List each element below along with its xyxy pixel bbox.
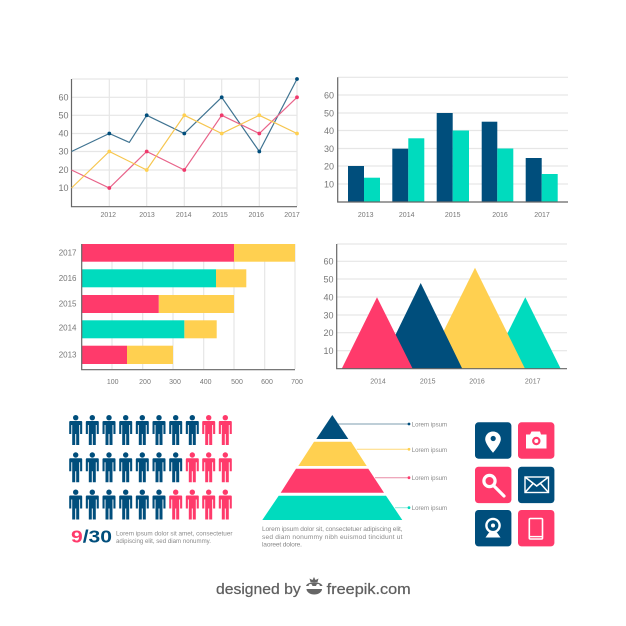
triangle chart: [323, 244, 567, 386]
column chart: 30: [324, 144, 334, 154]
triangle chart: 2015: [420, 378, 436, 386]
line chart: 10: [58, 183, 68, 193]
pyramid caption: [262, 526, 403, 548]
people caption: [116, 530, 233, 545]
footer credit: designed by: [216, 581, 301, 598]
triangle chart: 40: [323, 292, 334, 302]
pyramid connector lines: [338, 424, 409, 508]
line chart: 2017: [284, 212, 300, 219]
horizontal stacked bar chart: 300: [169, 379, 181, 386]
triangle chart: 2017: [525, 378, 541, 386]
triangle chart: 30: [323, 310, 334, 320]
column chart: 2016: [492, 212, 508, 219]
horizontal stacked bar chart: 600: [261, 379, 273, 386]
triangle 2017: [490, 297, 561, 369]
horizontal stacked bar chart: 500: [231, 379, 243, 386]
horizontal stacked bar chart: 100: [107, 379, 119, 386]
triangle chart: 50: [323, 274, 334, 284]
statistic 9/30: 9/30: [71, 526, 112, 546]
column chart: 2014: [399, 212, 415, 219]
column chart: [324, 77, 568, 219]
column chart: 2013: [358, 212, 374, 219]
pyramid chart: Lorem ipsum: [412, 421, 448, 428]
pyramid caption: laoreet dolore.: [262, 542, 302, 548]
pyramid caption: Lorem ipsum dolor sit, consectetuer adipiscing elit,: [262, 526, 403, 533]
people caption: Lorem ipsum dolor sit amet, consectetuer: [116, 530, 233, 537]
icon: envelope: [518, 467, 554, 503]
horizontal stacked bar chart: [59, 244, 303, 386]
horizontal stacked bar chart: 2016: [59, 274, 77, 283]
line chart: 2014: [176, 212, 192, 219]
line chart: 20: [58, 165, 68, 175]
triangle 2016: [425, 268, 525, 369]
pyramid chart: [262, 415, 448, 520]
column chart: 10: [324, 180, 334, 190]
people pictogram: [69, 415, 232, 520]
horizontal stacked bar chart: 700: [291, 379, 303, 386]
pink series: [72, 95, 299, 190]
navy series: [72, 77, 299, 153]
horizontal stacked bar chart: 2015: [59, 300, 77, 308]
line chart: 60: [58, 92, 68, 102]
people caption: adipiscing elit, sed diam nonummy.: [116, 538, 211, 545]
column chart: 2017: [534, 212, 550, 219]
footer credit: [216, 577, 411, 598]
triangle chart: 20: [323, 328, 334, 338]
triangle chart: 2016: [469, 378, 485, 386]
column chart: 20: [324, 162, 334, 172]
line chart: 2015: [212, 212, 228, 219]
yellow series: [72, 113, 299, 188]
horizontal stacked bar chart: 2013: [59, 350, 77, 360]
pyramid caption: sed diam nonummy nibh euismod tincidunt ut: [262, 534, 403, 541]
column chart: 2015: [445, 212, 461, 219]
line chart: 2013: [139, 212, 155, 219]
footer credit: freepik.com: [327, 581, 411, 598]
pyramid tier pink: [281, 469, 384, 493]
icon: location pin: [475, 422, 511, 459]
icon: webcam: [475, 510, 511, 546]
icon: smartphone: [518, 510, 554, 546]
triangle 2015: [379, 283, 462, 369]
triangle chart: 60: [323, 256, 334, 266]
icon: camera: [518, 422, 554, 459]
column chart: 40: [324, 126, 334, 136]
triangle chart: 10: [323, 346, 334, 356]
line chart: [58, 77, 300, 219]
column chart: 60: [324, 90, 334, 100]
pyramid chart: Lorem ipsum: [412, 447, 448, 454]
triangle 2014: [342, 297, 413, 369]
horizontal stacked bar chart: 2014: [59, 324, 77, 332]
column chart: 50: [324, 108, 334, 118]
triangle chart: 2014: [370, 378, 386, 386]
line chart: 2012: [101, 212, 116, 219]
horizontal stacked bar chart: 200: [139, 379, 151, 386]
pyramid tier navy: [316, 415, 348, 439]
pyramid tier teal: [262, 496, 402, 520]
horizontal stacked bar chart: 400: [200, 379, 212, 386]
line chart: 2016: [249, 212, 264, 219]
horizontal stacked bar chart: 2017: [59, 248, 77, 258]
icon: magnifier: [475, 467, 511, 503]
pyramid chart: Lorem ipsum: [412, 505, 448, 512]
line chart: 40: [58, 128, 68, 138]
icon: freepik logo: [306, 577, 322, 595]
pyramid tier yellow: [298, 442, 367, 466]
line chart: 30: [58, 146, 68, 156]
line chart: 50: [58, 110, 68, 120]
pyramid chart: Lorem ipsum: [412, 475, 448, 482]
